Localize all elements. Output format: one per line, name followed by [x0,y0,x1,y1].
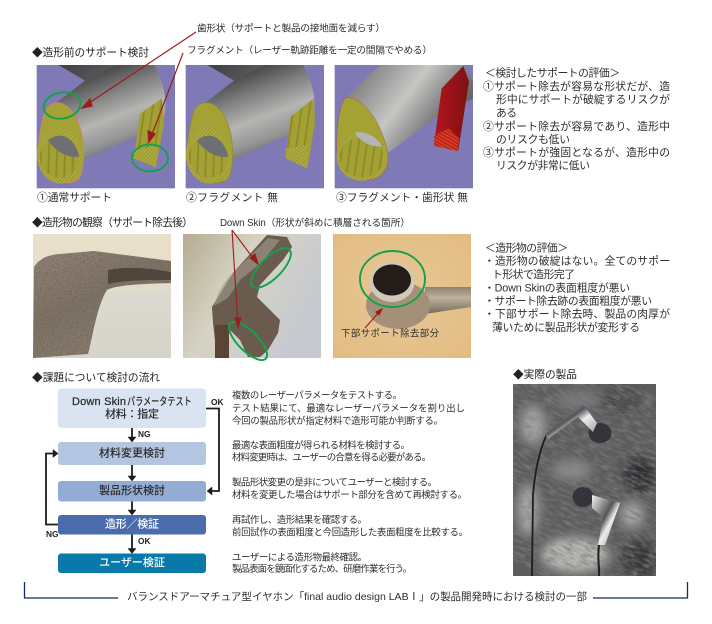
text block: build evaluation: ト形状で造形完了 [492,267,575,281]
flow label: NG loop: NG [46,529,58,539]
flow box: build and verify: 造形／検証 [105,516,159,530]
text block: build evaluation: ・Down Skinの表面粗度が悪い [484,280,630,294]
flow box: down skin parameter test [58,388,206,428]
text block: support evaluation: 形中にサポートが破綻するリスクが [496,92,670,106]
text block: support evaluation: ①サポート除去が容易な形状だが、造 [483,79,670,93]
text block: support evaluation: リスクが非常に低い [496,158,590,172]
photo: printed part side [33,234,171,358]
footer bracket and caption: バランスドアーマチュア型イヤホン「final audio design LABⅠ」の製品開発時における検討の一部 [127,590,588,603]
text block: flow explanations: 再試作し、造形結果を確認する。 [232,514,367,525]
text block: build evaluation: ・下部サポート除去時、製品の肉厚が [484,306,670,320]
panel: CAD normal support [34,65,175,188]
flow label: OK bottom: OK [138,536,150,546]
text block: support evaluation: のリスクも低い [496,133,570,146]
flow box: product shape: 製品形状検討 [99,483,165,497]
photo: actual earphones on fur [422,329,712,624]
text block: flow explanations: 製品形状変更の是非についてユーザーと検討する。 [232,476,437,488]
text block: flow explanations: 最適な表面粗度が得られる材料を検討する。 [232,440,410,450]
photo: printed part with down skin circles [183,230,321,366]
flow box: down skin parameter test: Down Skin [72,396,126,408]
flow box: user verification [58,554,206,573]
text block: support evaluation: ある [496,106,517,120]
text block: flow explanations [232,390,468,574]
text block: flow explanations: ユーザーによる造形物最終確認。 [232,552,367,562]
text block: support evaluation: ＜検討したサポートの評価＞ [485,66,620,80]
panel: CAD fragment and tooth none [335,65,473,188]
text block: flow explanations: 材料変更時は、ユーザーの合意を得る必要がある。 [232,452,431,462]
caption 1: ①通常サポート [37,191,112,204]
text block: build evaluation: 薄いために製品形状が変形する [492,320,640,334]
callout: tooth shape note: 歯形状（サポートと製品の接地面を減らす） [197,22,385,34]
flowchart [46,388,223,573]
heading: actual product: ◆実際の製品 [513,368,577,381]
text block: build evaluation: ・造形物の破綻はない。全てのサポー [484,254,670,268]
highlight: top green circle [42,89,82,122]
flow box: build and verify [58,515,206,534]
flow box: user verification: ユーザー検証 [99,555,165,569]
heading: support study before build: ◆造形前のサポート検討 [32,46,149,59]
text block: build evaluation: ＜造形物の評価＞ [485,240,568,254]
text block: support evaluation [483,66,670,172]
heading: build observation: ◆造形物の観察（サポート除去後） [32,216,193,229]
text block: build evaluation: ・サポート除去跡の表面粗度が悪い [484,294,652,308]
flow box: down skin parameter test: パラメータテスト [127,395,192,408]
text block: support evaluation: ③サポートが強固となるが、造形中の [483,145,670,159]
flow box: material change: 材料変更検討 [99,446,165,460]
panel: CAD fragment none [183,65,324,188]
caption 3: ③フラグメント・歯形状 無 [336,190,468,204]
text block: flow explanations: 複数のレーザーパラメータをテストする。 [232,390,402,400]
flow label: NG first: NG [138,429,150,439]
caption 2: ②フラグメント 無 [186,190,278,204]
text block: support evaluation: ②サポート除去が容易であり、造形中 [483,119,670,133]
arrow: fragment note to second circle [148,53,183,142]
flow box: down skin parameter test: 材料：指定 [105,406,159,420]
text block: flow explanations: 今回の製品形状が指定材料で造形可能か判断する。 [232,415,443,426]
text block: flow explanations: 材料を変更した場合はサポート部分を含めて再検討する。 [232,489,467,500]
flow box: product shape [58,481,206,502]
flow box: material change [58,442,206,465]
footer bracket and caption [24,582,688,603]
flow label: OK right: OK [211,397,223,407]
arrow: tooth note to first circle [82,32,196,108]
text block: build evaluation [484,240,670,334]
text block: flow explanations: テスト結果にて、最適なレーザーパラメータを割り出し [232,402,465,414]
text block: flow explanations: 製品表面を鏡面化するため、研磨作業を行う。 [232,563,412,574]
callout: fragment note: フラグメント（レーザー軌跡距離を一定の間隔でやめる） [187,44,432,56]
flow arrows [46,408,219,554]
heading: study flow: ◆課題について検討の流れ [32,371,160,384]
photo: bottom support removal [333,234,471,358]
text block: flow explanations: 前回試作の表面粗度と今回造形した表面粗度を比較する。 [232,526,468,538]
callout: down skin note: Down Skin（形状が斜めに積層される箇所） [220,216,410,229]
highlight: support green circle [132,144,168,172]
photo: bottom support removal: 下部サポート除去部分 [341,328,440,338]
